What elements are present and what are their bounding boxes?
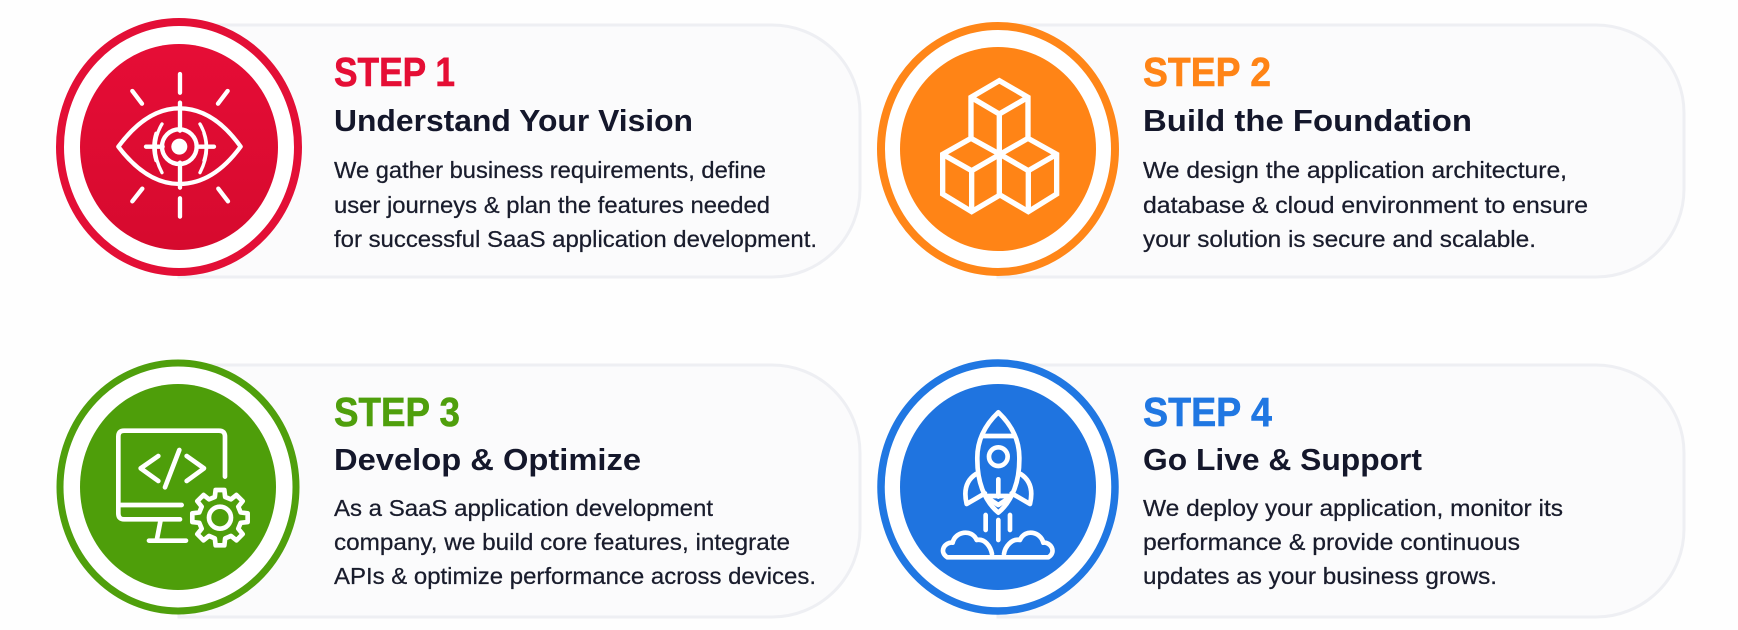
step description [1143,157,1588,252]
step description: As a SaaS application development [334,495,714,521]
step description: for successful SaaS application development. [334,226,817,252]
badge ring [60,22,298,272]
icon: monitor with code and gear [118,431,248,545]
step label: STEP 1 [334,49,455,95]
step description: performance & provide continuous [1143,529,1520,555]
step title: Understand Your Vision [334,103,693,138]
step description: We deploy your application, monitor its [1143,495,1563,521]
card background [179,25,860,277]
panel: step 4 go live and support [881,363,1684,617]
step label: STEP 2 [1143,49,1271,95]
step description: your solution is secure and scalable. [1143,226,1536,252]
badge ring [60,363,296,611]
step description [334,495,816,589]
badge ring [881,363,1115,611]
step label: STEP 3 [334,389,460,435]
card background [179,365,860,617]
step title: Develop & Optimize [334,442,641,477]
panel: step 3 develop and optimize [60,363,860,617]
badge disc [900,47,1096,251]
step description: We design the application architecture, [1143,157,1567,183]
icon: eye with target [118,74,241,217]
step description: APIs & optimize performance across devices. [334,563,816,589]
step description: We gather business requirements, define [334,157,766,183]
step description: user journeys & plan the features needed [334,192,770,218]
panel: step 1 understand your vision [60,22,860,277]
step title: Go Live & Support [1143,442,1422,477]
step label: STEP 4 [1143,389,1272,435]
step description [1143,495,1563,589]
badge disc [900,384,1096,590]
step description [334,157,817,252]
step description: database & cloud environment to ensure [1143,192,1588,218]
badge disc [80,384,276,590]
icon: stacked cubes [943,81,1057,212]
card background [998,365,1684,617]
step title: Build the Foundation [1143,103,1472,138]
icon: rocket launch [943,412,1053,557]
step description: company, we build core features, integrate [334,529,790,555]
step description: updates as your business grows. [1143,563,1497,589]
panel: step 2 build the foundation [881,25,1684,277]
card background [998,25,1684,277]
badge ring [881,26,1115,272]
badge disc [80,44,278,250]
